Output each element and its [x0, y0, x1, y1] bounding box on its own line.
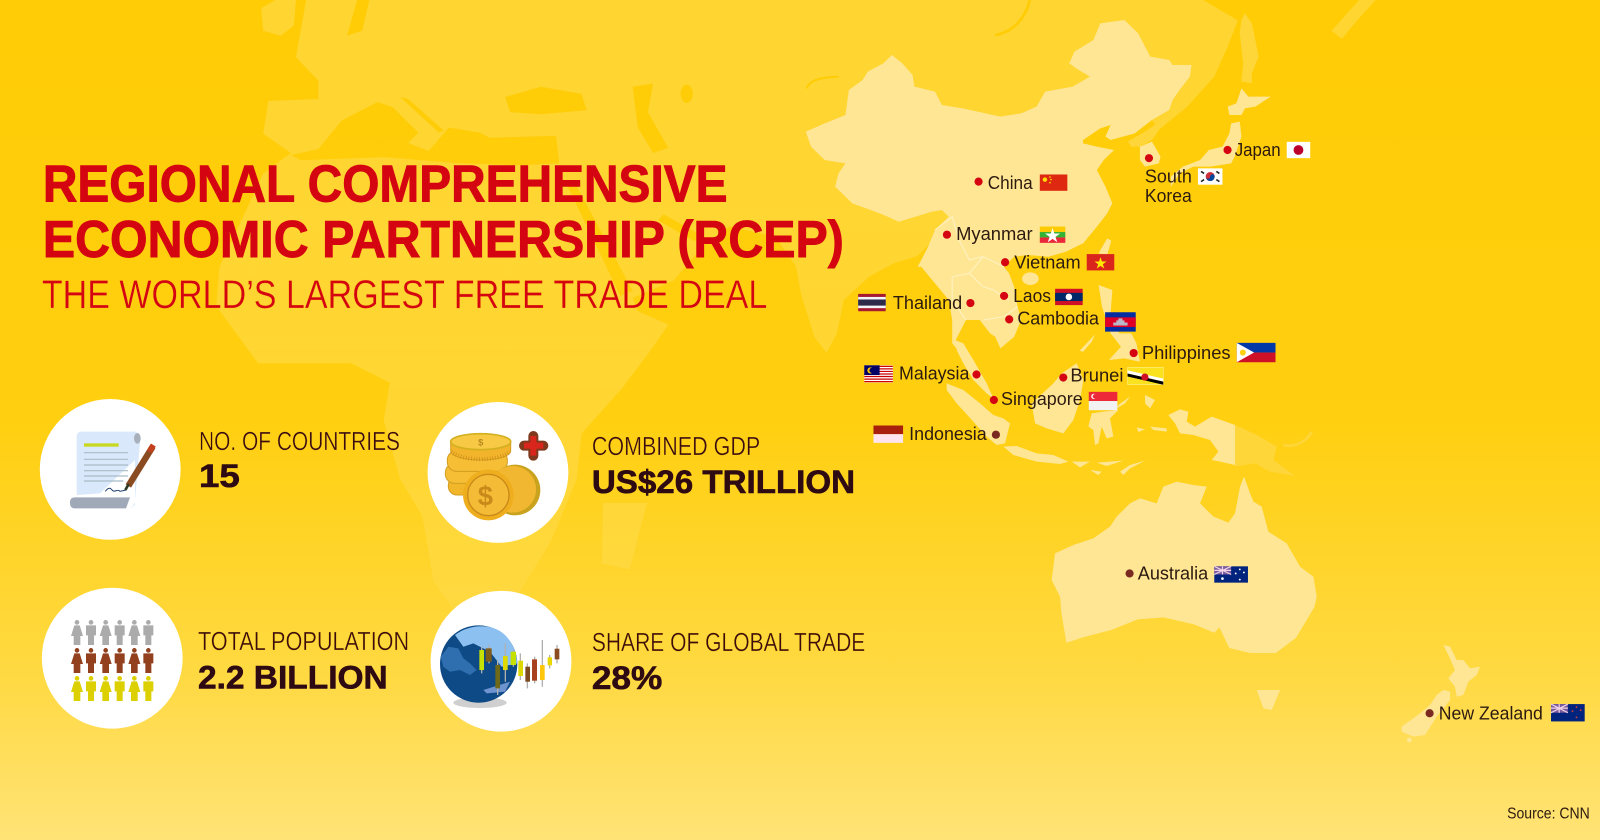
country: Singapore — [990, 388, 1117, 410]
map: Taiwan — [1099, 238, 1111, 255]
country: Indonesia: Indonesia — [909, 423, 988, 444]
icon: gold coins: $ — [478, 437, 484, 447]
stat: combined GDP — [428, 402, 855, 543]
map: Maritime Southeast Asia and Australia — [947, 340, 1317, 710]
country: Australia — [1126, 563, 1248, 584]
subtitle: THE WORLD’S LARGEST FREE TRADE DEAL — [42, 273, 767, 317]
country: Japan: Japan — [1235, 139, 1281, 160]
icon: gold coins — [428, 402, 568, 543]
value: 15 — [199, 457, 240, 494]
country: Laos: Laos — [1013, 285, 1051, 306]
country: Myanmar — [943, 223, 1065, 244]
country: Brunei — [1059, 365, 1163, 386]
country: China: China — [988, 172, 1033, 193]
value: 2.2 BILLION — [198, 658, 388, 695]
label: NO. OF COUNTRIES — [199, 428, 400, 456]
title — [43, 156, 844, 269]
country: Myanmar: Myanmar — [956, 223, 1033, 244]
label: SHARE OF GLOBAL TRADE — [592, 629, 865, 657]
icon: globe with candlesticks — [431, 591, 571, 732]
country: Cambodia: Cambodia — [1017, 307, 1100, 328]
country: Australia: Australia — [1138, 563, 1209, 584]
country: Japan — [1223, 139, 1310, 160]
title: ECONOMIC PARTNERSHIP (RCEP) — [43, 211, 844, 269]
country: Vietnam: Vietnam — [1014, 251, 1081, 272]
country: New Zealand — [1426, 702, 1585, 723]
map: Australia — [1052, 477, 1317, 653]
country: New Zealand: New Zealand — [1439, 702, 1543, 723]
country: Laos — [1000, 285, 1083, 306]
label: COMBINED GDP — [592, 433, 760, 461]
stat: number of countries — [40, 399, 400, 540]
country: Malaysia: Malaysia — [899, 363, 970, 384]
map: Hainan — [1022, 272, 1039, 285]
map: RCEP member countries — [806, 20, 1480, 742]
map: New Zealand — [1402, 645, 1480, 742]
icon: signed document — [40, 399, 181, 540]
map: China and mainland Southeast Asia — [806, 20, 1271, 363]
source: Source: CNN — [1507, 805, 1590, 822]
country: Brunei: Brunei — [1070, 365, 1123, 386]
country: South Korea: Korea — [1145, 185, 1193, 206]
map: Philippines — [1080, 285, 1140, 362]
icon: rows of people — [42, 588, 183, 729]
country: Vietnam — [1001, 251, 1114, 272]
country: Thailand: Thailand — [893, 292, 962, 313]
country: South Korea — [1145, 154, 1222, 206]
label: TOTAL POPULATION — [198, 628, 409, 656]
value: US$26 TRILLION — [592, 463, 855, 500]
icon: gold coins: $ — [478, 480, 493, 511]
stat: share of global trade — [431, 591, 865, 732]
title: REGIONAL COMPREHENSIVE — [43, 156, 728, 214]
country: South Korea: South — [1145, 166, 1192, 187]
world map backdrop — [216, 0, 1376, 617]
country: Philippines — [1130, 342, 1276, 363]
value: 28% — [592, 659, 662, 696]
map: Japan — [1171, 88, 1271, 187]
country: Singapore: Singapore — [1001, 388, 1083, 409]
country: Malaysia — [864, 363, 981, 384]
country: Indonesia — [873, 423, 1000, 444]
country: Philippines: Philippines — [1142, 342, 1231, 363]
country: China — [974, 172, 1067, 193]
country: Cambodia — [1005, 307, 1136, 332]
country: Thailand — [858, 292, 974, 313]
stat: total population — [42, 588, 409, 729]
map: Korea — [1140, 142, 1161, 167]
